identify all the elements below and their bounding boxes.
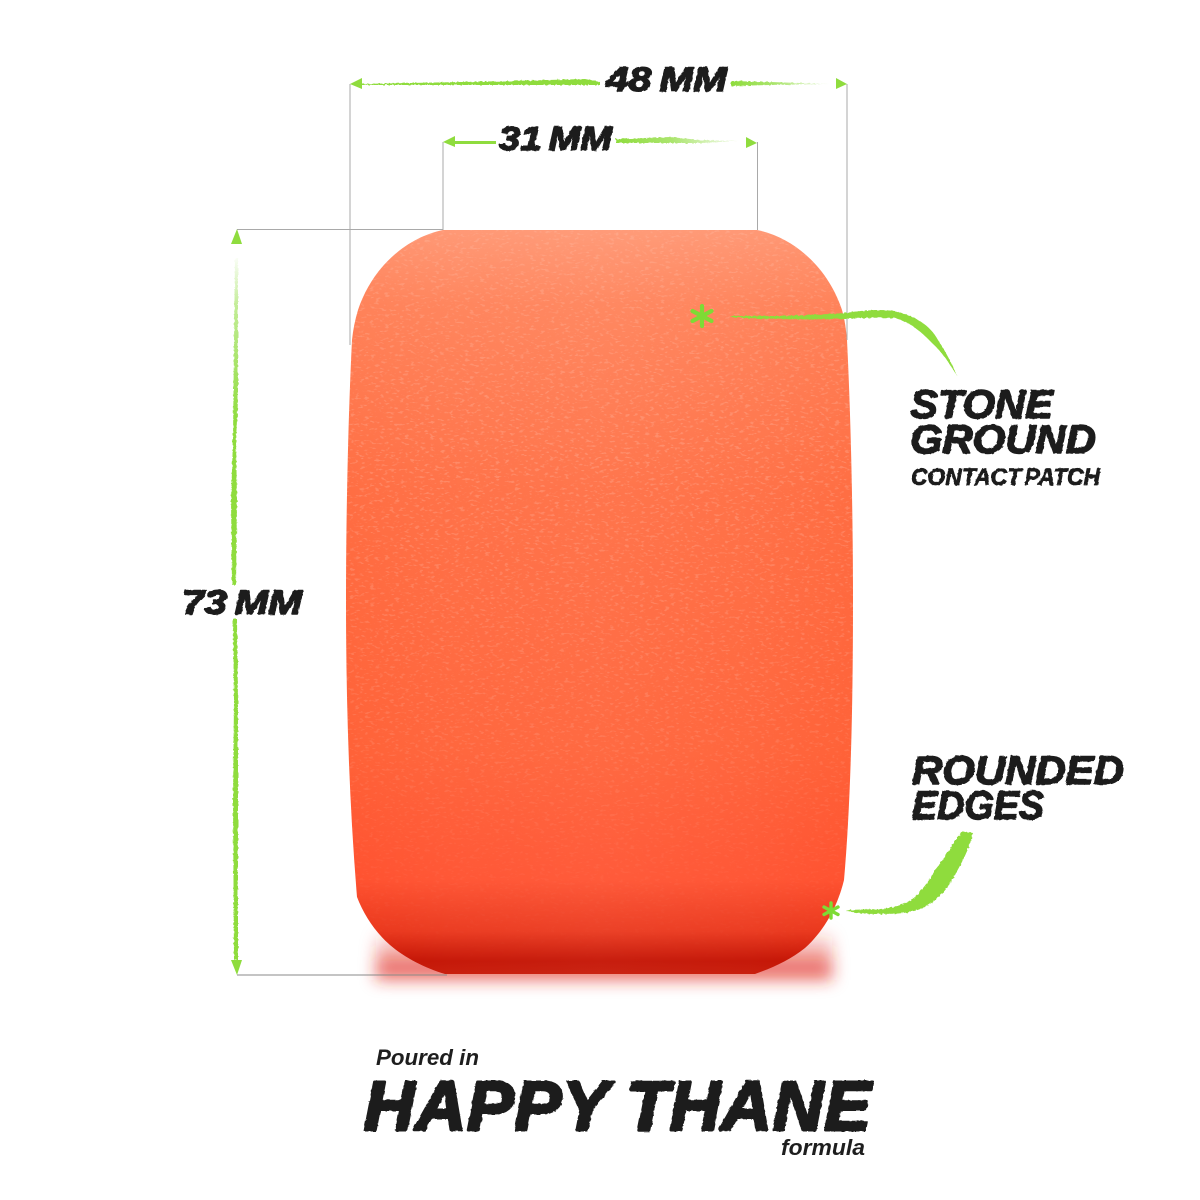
dimension: 73 mm height (182, 229, 303, 975)
formula: formula (781, 1135, 865, 1160)
dimension: 48 mm width: 48 MM (605, 61, 728, 99)
dimension: 48 mm width (350, 61, 847, 99)
floor shadow (376, 930, 832, 980)
poured in: Poured in (376, 1045, 479, 1070)
label: ground: GROUND (910, 418, 1096, 462)
callout: rounded edges (824, 749, 1124, 918)
icon: asterisk marker (692, 306, 712, 326)
callout leader line (846, 831, 973, 914)
dimension: 31 mm contact patch: 31 MM (499, 120, 614, 157)
dimension guide lines (237, 84, 847, 975)
icon: small asterisk marker (824, 903, 838, 918)
formula branding (364, 1045, 873, 1160)
label: contact patch: CONTACT PATCH (911, 464, 1101, 491)
callout leader line (730, 310, 957, 376)
label: stone: STONE (910, 383, 1054, 427)
label: rounded: ROUNDED (912, 749, 1124, 793)
wheel (340, 225, 860, 980)
wheel dimensions infographic (184, 66, 1124, 1155)
happy thane logotype: HAPPY THANE (364, 1067, 873, 1145)
label: edges: EDGES (912, 784, 1044, 828)
callout: stone ground contact patch (692, 306, 1101, 491)
dimension: 73 mm height: 73 MM (182, 584, 303, 622)
dimension: 31 mm contact patch (443, 120, 757, 157)
